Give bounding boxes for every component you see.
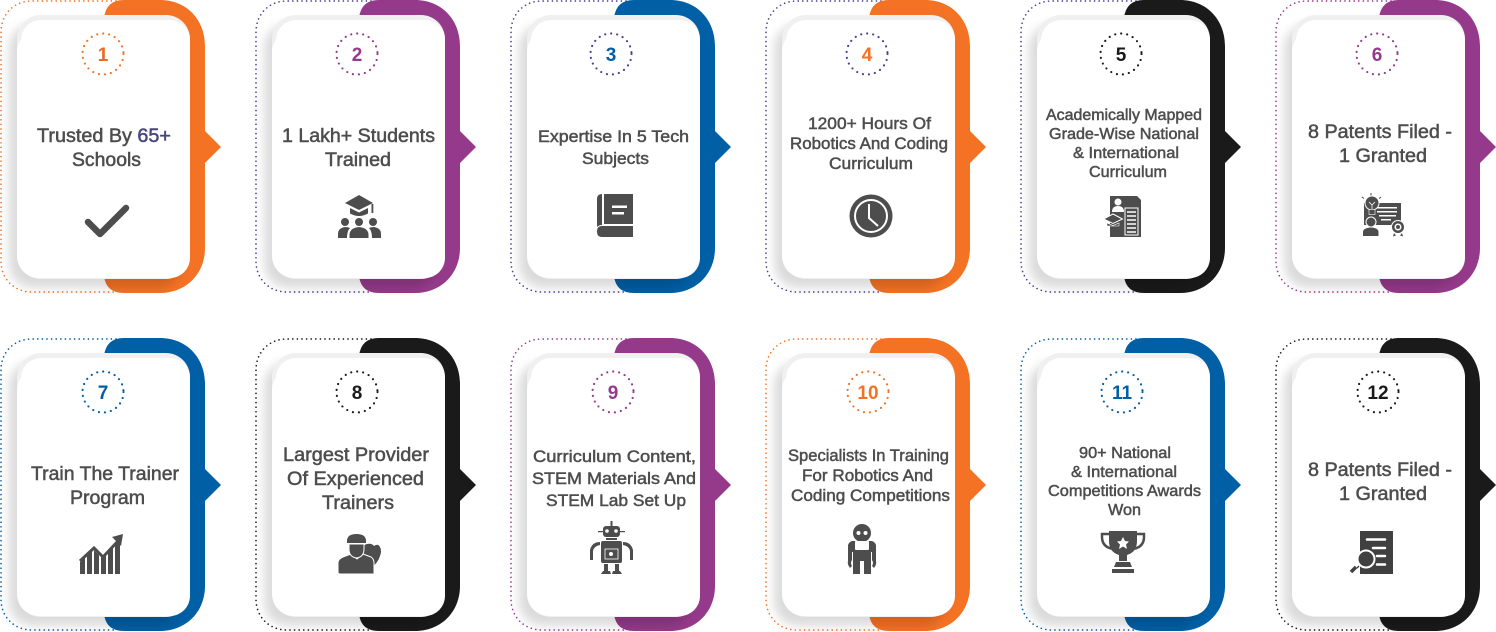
panel: card 5 — [1021, 0, 1241, 293]
badge: number 5: 5 — [1116, 45, 1127, 66]
panel: card 7 — [1, 338, 221, 631]
badge: number 12 — [1358, 372, 1398, 412]
panel: card 12 — [1276, 338, 1496, 631]
panel: card 1 — [1, 0, 221, 293]
text: 90+ national: & International — [1071, 464, 1177, 481]
text: curriculum content: STEM Lab Set Up — [546, 491, 686, 510]
text: specialists in training: Specialists In Training — [788, 446, 949, 465]
badge: number 7: 7 — [98, 383, 108, 404]
text: specialists in training — [788, 446, 950, 505]
text: 8 patents filed: 1 Granted — [1339, 146, 1427, 167]
icon: curriculum document — [1104, 196, 1141, 237]
panel: card 10 — [766, 338, 986, 631]
text: 8 patents filed: 8 Patents Filed - — [1308, 122, 1452, 143]
badge: number 1 — [82, 34, 124, 74]
panel: card 11 — [1021, 338, 1241, 631]
badge: number 1: 1 — [98, 45, 109, 66]
text: trusted by 65+ schools: Trusted By 65+ — [37, 126, 171, 147]
text: largest provider: Trainers — [322, 493, 394, 514]
icon: book — [597, 194, 633, 237]
text: curriculum content — [532, 447, 696, 510]
badge: number 6 — [1356, 34, 1398, 74]
badge: number 9: 9 — [608, 383, 618, 404]
text: expertise in 5 tech subjects — [538, 127, 689, 168]
badge: number 8 — [336, 372, 378, 412]
text: curriculum content: Curriculum Content, — [533, 447, 696, 466]
badge: number 11 — [1102, 372, 1142, 412]
badge: number 3: 3 — [606, 45, 616, 66]
text: curriculum content: STEM Materials And — [532, 469, 696, 488]
text: academically mapped — [1046, 107, 1202, 181]
badge: number 10: 10 — [857, 383, 879, 404]
icon: trainer with heart — [338, 534, 381, 574]
panel: card 3 — [511, 0, 731, 293]
icon: document search — [1351, 531, 1393, 574]
text: 90+ national: 90+ National — [1079, 445, 1171, 462]
text: 1 lakh+ students trained: Trained — [325, 150, 391, 171]
badge: number 11: 11 — [1112, 383, 1132, 404]
badge: number 4 — [846, 34, 888, 74]
text: 8 patents filed: 8 Patents Filed - — [1308, 460, 1452, 481]
text: 8 patents filed — [1308, 460, 1452, 505]
badge: number 6: 6 — [1372, 45, 1382, 66]
panel: card 9 — [511, 338, 731, 631]
badge: number 3 — [590, 34, 632, 74]
icon: trophy — [1102, 531, 1144, 573]
icon: growth chart — [80, 534, 123, 574]
badge: number 7 — [82, 372, 124, 412]
text: trusted by 65+ schools: Schools — [72, 150, 141, 171]
text: largest provider: Of Experienced — [287, 469, 424, 490]
badge: number 10 — [848, 372, 888, 412]
badge: number 8: 8 — [352, 383, 362, 404]
text: 1 lakh+ students trained — [282, 126, 435, 171]
badge: number 12: 12 — [1367, 383, 1389, 404]
text: academically mapped: Curriculum — [1089, 164, 1167, 181]
text: 90+ national: Competitions Awards — [1048, 483, 1201, 500]
text: train the trainer — [31, 464, 180, 509]
text: 1 lakh+ students trained: 1 Lakh+ Students — [282, 126, 435, 147]
text: 90+ national: Won — [1108, 502, 1141, 519]
text: academically mapped: & International — [1073, 145, 1179, 162]
text: 1200+ hours: Robotics And Coding — [790, 134, 948, 153]
text: trusted by 65+ schools — [37, 126, 171, 171]
text: train the trainer: Train The Trainer — [31, 464, 180, 485]
text: largest provider — [283, 445, 430, 514]
icon: humanoid robot — [848, 524, 876, 574]
text: academically mapped: Grade-Wise National — [1049, 126, 1199, 143]
panel: card 6 — [1276, 0, 1496, 293]
text: expertise in 5 tech subjects: Expertise In 5 Tech — [538, 127, 689, 146]
badge: number 2: 2 — [352, 45, 362, 66]
badge: number 2 — [336, 34, 378, 74]
panel: card 8 — [256, 338, 476, 631]
panel: card 2 — [256, 0, 476, 293]
text: 8 patents filed: 1 Granted — [1339, 484, 1427, 505]
text: 1200+ hours: 1200+ Hours Of — [808, 114, 931, 133]
text: expertise in 5 tech subjects: Subjects — [582, 149, 649, 168]
icon: robot — [590, 521, 633, 574]
text: 90+ national — [1048, 445, 1201, 519]
text: specialists in training: For Robotics And — [802, 466, 933, 485]
text: 1200+ hours: Curriculum — [829, 154, 913, 173]
panel: card 4 — [766, 0, 986, 293]
text: specialists in training: Coding Competitions — [791, 486, 950, 505]
icon: graduates — [338, 195, 381, 238]
text: 8 patents filed — [1308, 122, 1452, 167]
badge: number 5 — [1100, 34, 1142, 74]
icon: patent certificate — [1362, 193, 1404, 236]
text: 1200+ hours — [790, 114, 948, 173]
text: train the trainer: Program — [70, 488, 145, 509]
text: largest provider: Largest Provider — [283, 445, 430, 466]
icon: check mark — [88, 208, 126, 234]
badge: number 9 — [592, 372, 634, 412]
badge: number 4: 4 — [862, 45, 873, 66]
icon: clock — [850, 194, 892, 238]
text: academically mapped: Academically Mapped — [1046, 107, 1202, 124]
